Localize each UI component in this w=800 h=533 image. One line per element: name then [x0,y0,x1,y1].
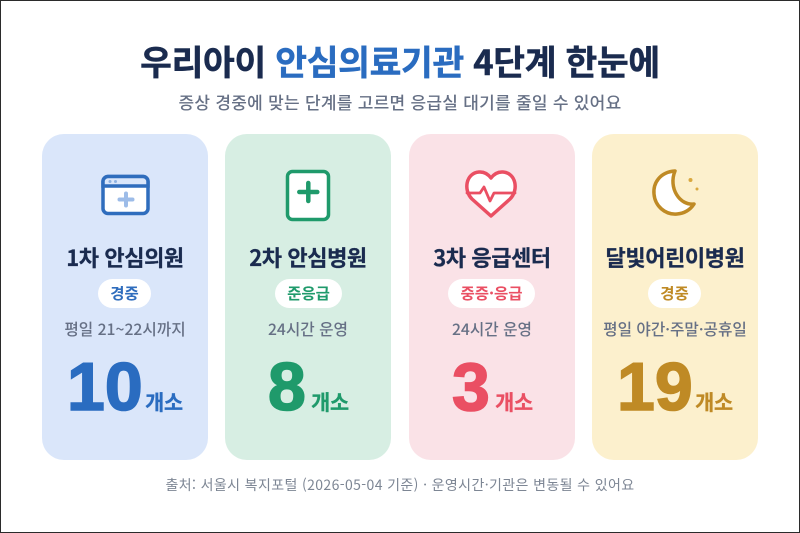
panel: 3차 응급센터 [409,134,575,460]
icon: moon and stars [652,169,698,216]
severity pill [448,279,535,308]
icon: hospital plus [286,170,330,222]
count: 개소 [495,386,533,416]
severity pill: 준응급 [287,282,330,304]
panel: 달빛어린이병원 [592,134,758,460]
severity pill [98,279,151,308]
count [452,348,533,424]
hours: 평일 21~22시까지 [64,317,186,340]
title: 우리아이 안심의료기관 4단계 한눈에 [140,35,660,85]
count: 19 [617,348,693,424]
count: 8 [268,348,306,424]
heading: 1차 안심의원 [66,241,184,273]
count [617,348,733,424]
count: 3 [452,348,490,424]
count: 개소 [311,386,349,416]
severity pill: 중증·응급 [460,282,523,304]
count: 개소 [145,386,183,416]
icon: heart pulse [465,170,517,218]
icon: clinic window [101,174,150,216]
source note: 출처: 서울시 복지포털 (2026-05-04 기준) · 운영시간·기관은 변동될 수 있어요 [166,475,634,495]
severity pill [648,279,701,308]
hours: 평일 야간·주말·공휴일 [603,317,747,340]
heading: 3차 응급센터 [433,241,551,273]
count [268,348,349,424]
count [67,348,183,424]
heading: 달빛어린이병원 [606,241,744,273]
severity pill: 경중 [110,282,139,304]
severity pill [275,279,342,308]
count: 개소 [695,386,733,416]
heading: 2차 안심병원 [249,241,367,273]
hours: 24시간 운영 [268,317,348,340]
hours: 24시간 운영 [452,317,532,340]
severity pill: 경중 [660,282,689,304]
subtitle: 증상 경중에 맞는 단계를 고르면 응급실 대기를 줄일 수 있어요 [178,89,622,114]
count: 10 [67,348,143,424]
panel: 1차 안심의원 [42,134,208,460]
panel: 2차 안심병원 [225,134,391,460]
